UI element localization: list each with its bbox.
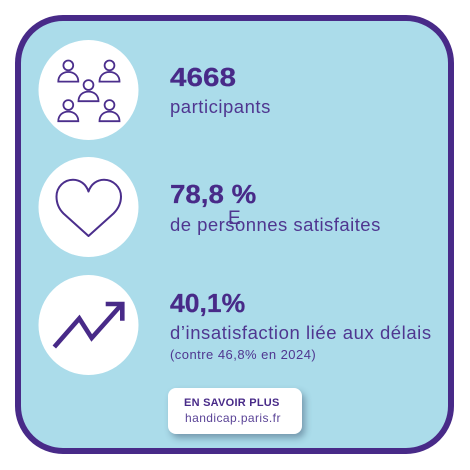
note: contre 46,8% en 2024: (contre 46,8% en 2024) <box>170 347 316 362</box>
stray letter E: E <box>228 208 241 229</box>
button heading: EN SAVOIR PLUS <box>184 397 280 409</box>
button link text: handicap.paris.fr <box>185 411 281 425</box>
number: 4668: 4668 <box>170 62 236 92</box>
label: de personnes satisfaites: de personnes satisfaites <box>170 214 381 235</box>
stat: satisfied people <box>170 179 381 235</box>
label: participants: participants <box>170 96 271 117</box>
icon: heart <box>38 157 138 257</box>
stat: participants <box>170 62 271 117</box>
icon: rising trend arrow <box>38 275 138 375</box>
button: en savoir plus <box>168 388 302 434</box>
icon: participants group <box>38 40 138 140</box>
label: d'insatisfaction liée aux délais: d’insatisfaction liée aux délais <box>170 322 432 343</box>
stat: dissatisfaction with delays <box>170 288 432 362</box>
number: 78,8 %: 78,8 % <box>170 179 256 209</box>
number: 40,1%: 40,1% <box>170 288 245 318</box>
